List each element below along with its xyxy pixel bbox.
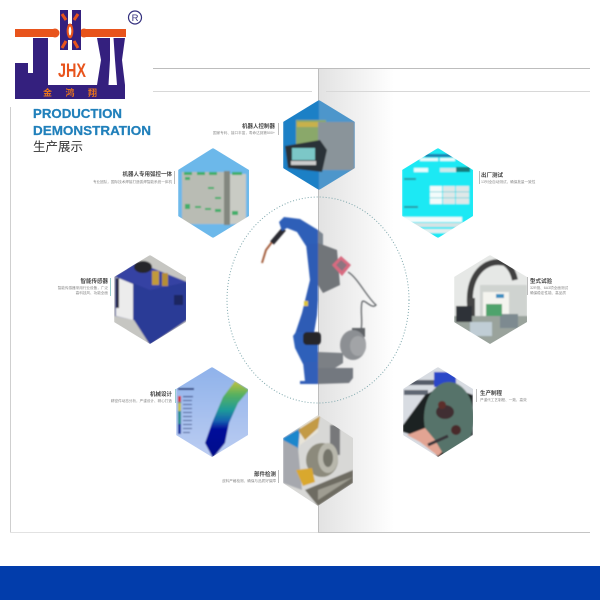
label: parts inspection: 皮料严格检测、确保与品质好保障 — [222, 478, 276, 483]
robot: black motor — [303, 332, 321, 345]
hexagon: production process — [403, 367, 474, 458]
dotted circle — [227, 197, 409, 403]
label: smart sensor: 智能传感器 — [80, 277, 108, 285]
label: smart sensor — [58, 277, 110, 296]
label: parts inspection — [222, 470, 278, 483]
label: robot controller: 国家专利、接口丰富，寿命达到第500+ — [213, 130, 275, 135]
label: type test: 型式试验 — [530, 277, 553, 285]
label: production process: 生产制程 — [480, 389, 503, 397]
label: smart sensor: 智能传感器采用行业设备，广泛 — [58, 285, 108, 290]
hexagon: smart sensor — [114, 255, 187, 346]
label: mechanical design: 精密件动态分析，严谨设计、精心打造 — [111, 398, 172, 403]
robot arm illustration — [262, 217, 376, 384]
logo: registered mark: R — [132, 13, 139, 24]
title: english line 2: DEMONSTRATION — [33, 123, 151, 138]
robot: wire feeder — [340, 328, 366, 360]
label: smart sensor: 高科技风、功能全面 — [76, 290, 108, 295]
panel: right page shading — [318, 68, 394, 532]
logo: X hourglass cut — [108, 38, 117, 85]
label: mechanical design — [111, 389, 176, 403]
hexagon: robot controller — [283, 100, 355, 190]
robot: right grey body — [318, 243, 340, 293]
logo: top emblem — [60, 10, 81, 50]
logo: X letter — [97, 38, 125, 90]
label: integrated controller: 机器人专用弧控一体 — [122, 170, 172, 178]
page frame lines — [10, 68, 590, 533]
robot: lower joint — [293, 332, 318, 364]
label: production process: 严谨代工艺制程、一致、高效 — [480, 397, 527, 402]
logo — [15, 10, 142, 99]
hexagon: factory test — [402, 148, 474, 238]
logo: orange bar — [15, 28, 126, 38]
robot: forearm — [279, 217, 318, 246]
label: production process — [476, 389, 527, 402]
hexagon: parts inspection — [283, 415, 354, 507]
robot: cable — [348, 272, 376, 330]
label: type test — [528, 277, 569, 295]
label: type test: 32R测、6A3项全面测试 — [530, 285, 569, 290]
title: english line 1: PRODUCTION — [33, 106, 122, 121]
label: factory test: 13列全自动测试，确保批量一致性 — [481, 179, 536, 184]
label: factory test: 出厂测试 — [481, 171, 504, 179]
robot: forearm grey end — [318, 230, 323, 250]
hexagon: type test — [454, 255, 528, 346]
robot: pink control box — [332, 256, 351, 276]
label: robot controller: 机器人控制器 — [242, 122, 275, 130]
bottom band — [0, 566, 600, 600]
robot: base blue — [300, 362, 318, 384]
title — [33, 106, 151, 154]
hexagon: integrated controller — [178, 148, 250, 238]
label: parts inspection: 部件检测 — [254, 470, 276, 478]
label: type test: 确保稳定性能、高品质 — [530, 290, 566, 295]
label: mechanical design: 机械设计 — [150, 390, 172, 398]
label: integrated controller: 专业团队，国际技术焊接打造弧焊智能系统一体机 — [93, 179, 172, 184]
label: robot controller — [213, 122, 278, 135]
label: integrated controller — [93, 170, 174, 184]
robot: yellow dot — [304, 301, 308, 306]
hexagon: mechanical design — [176, 367, 249, 458]
robot: base grey — [318, 368, 353, 384]
label: factory test — [480, 171, 536, 184]
logo: J and base band — [15, 38, 125, 99]
robot: torch — [262, 232, 281, 263]
logo: Chinese name: 金 鸿 翔 — [43, 87, 97, 98]
robot: upper arm — [295, 244, 318, 334]
robot: lower grey body — [318, 352, 343, 368]
title: chinese: 生产展示 — [33, 140, 83, 154]
logo: JHX text: JHX — [58, 61, 86, 82]
